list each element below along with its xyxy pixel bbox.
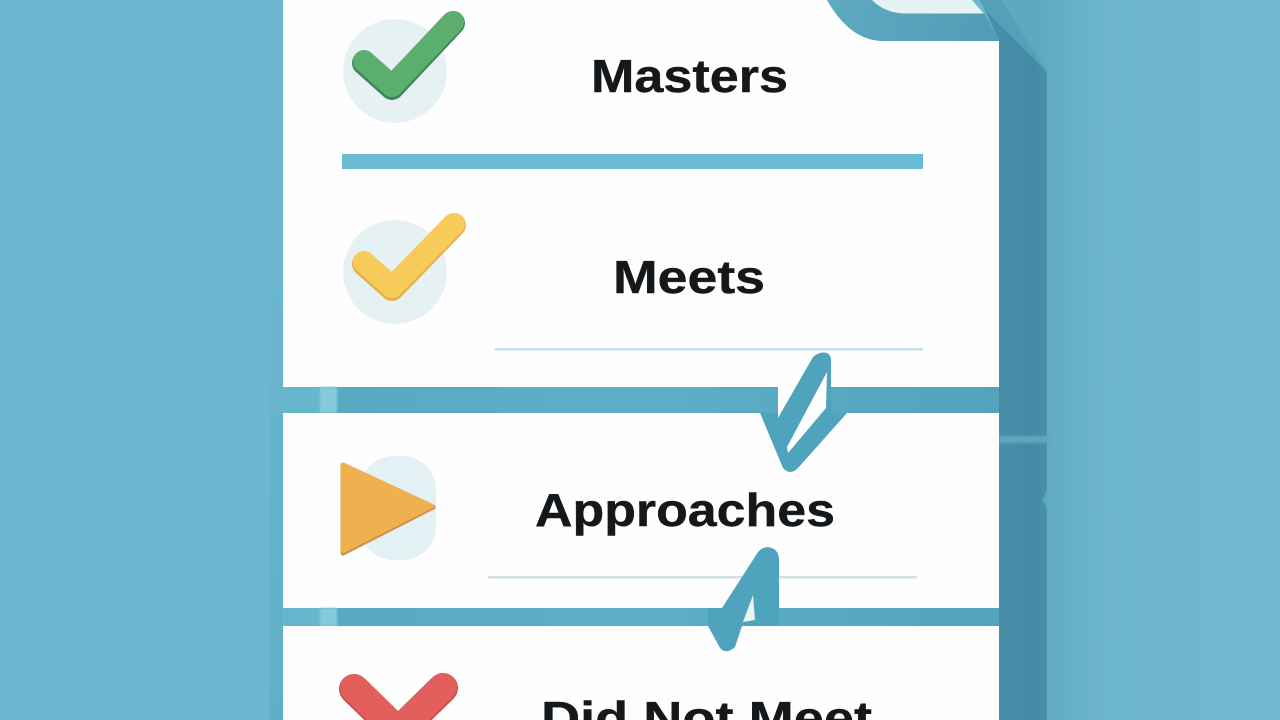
- icon: yellow check: [343, 220, 454, 324]
- label: Approaches: Approaches: [535, 484, 835, 536]
- folded corner: [827, 0, 999, 41]
- tick connector 1: [760, 352, 847, 472]
- document side shadow: [980, 0, 1049, 720]
- card: Did Not Meet: [283, 626, 999, 720]
- band 1: [283, 387, 999, 413]
- icon: red cross: [354, 687, 443, 720]
- card: Masters: [283, 0, 999, 387]
- row: Meets: [343, 220, 923, 350]
- band 2: [283, 608, 999, 626]
- thin rule: [488, 576, 917, 578]
- divider bar: [342, 154, 923, 169]
- thin rule: [495, 348, 923, 350]
- icon: orange triangle: [343, 456, 436, 560]
- document left edge: [270, 0, 283, 720]
- label: Meets: Meets: [613, 251, 765, 303]
- icon: green check: [343, 19, 453, 123]
- tick connector 2: [708, 547, 779, 651]
- label: Masters: Masters: [591, 50, 788, 102]
- card: Approaches: [283, 413, 999, 608]
